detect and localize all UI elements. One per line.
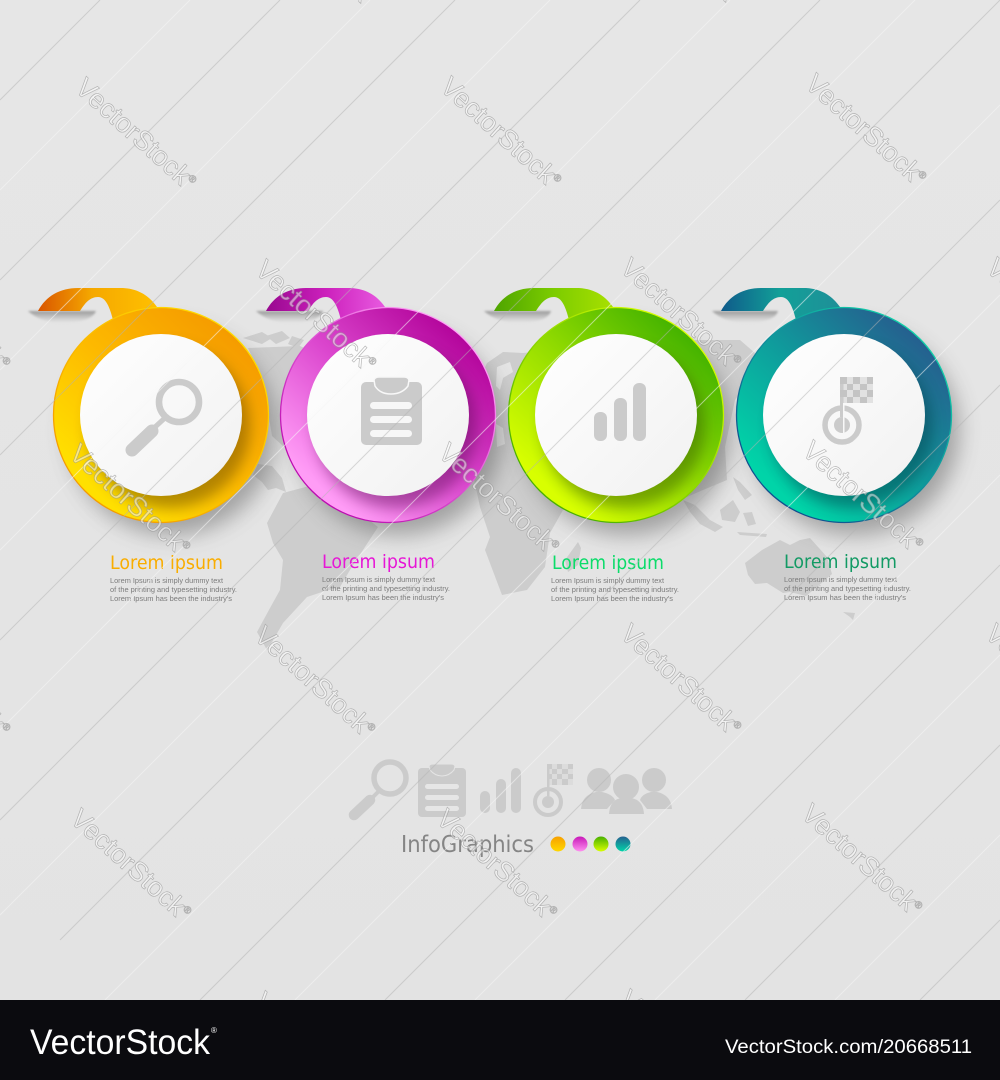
- icon: clipboard: [361, 377, 422, 445]
- watermarks: ®: [548, 538, 562, 552]
- watermarks: ®: [912, 536, 926, 550]
- heading 4: Lorem ipsum: [784, 551, 897, 573]
- watermarks: ®: [364, 721, 378, 735]
- watermarks: ®: [911, 899, 925, 913]
- step 2: clipboard: [256, 288, 503, 602]
- disc 2: [307, 334, 469, 496]
- ribbon tail 4: [712, 288, 840, 323]
- watermarks: VectorStock: [65, 803, 192, 922]
- text 4: Lorem Ipsum has been the industry's: [784, 595, 907, 602]
- text 2: Lorem Ipsum has been the industry's: [322, 595, 445, 602]
- watermarks: ®: [365, 355, 379, 369]
- icon: magnifier: [132, 382, 199, 450]
- text 3: of the printing and typesetting industry.: [551, 587, 679, 594]
- ribbon tail 1: [28, 288, 157, 323]
- text 4: of the printing and typesetting industry.: [784, 586, 911, 593]
- watermarks: ®: [550, 172, 564, 186]
- world map: [243, 331, 855, 650]
- watermarks: ®: [546, 904, 560, 918]
- text 2: Lorem Ipsum is simply dummy text: [322, 577, 435, 584]
- icon: small magnifier: [354, 762, 406, 815]
- watermarks: VectorStock: [250, 254, 377, 373]
- ring 1: [54, 308, 268, 522]
- watermarks: VectorStock: [64, 438, 191, 557]
- watermarks: ®: [185, 173, 199, 187]
- heading 3: Lorem ipsum: [552, 552, 664, 574]
- ring 2: [280, 308, 496, 522]
- heading 1: Lorem ipsum: [110, 552, 223, 574]
- text 4: Lorem Ipsum is simply dummy text: [784, 577, 897, 584]
- watermarks: VectorStock: [431, 803, 558, 922]
- watermarks: VectorStock: [615, 252, 742, 371]
- icon: people: [581, 768, 672, 814]
- ribbon tail 2: [256, 288, 385, 323]
- icon row: [354, 762, 672, 817]
- watermarks: VectorStock: [435, 71, 562, 190]
- watermarks: ®: [180, 904, 194, 918]
- text 1: [110, 578, 237, 603]
- watermarks: VectorStock: [70, 72, 197, 191]
- watermarks: VectorStock: [796, 798, 923, 917]
- step 3: chart: [484, 288, 731, 603]
- colour dots: [550, 836, 630, 852]
- watermarks: VectorStock: [797, 435, 924, 554]
- text 1: of the printing and typesetting industry.: [110, 587, 237, 594]
- icon: small bars: [480, 768, 521, 813]
- registered mark: ®: [211, 1026, 217, 1035]
- text 3: Lorem Ipsum is simply dummy text: [551, 578, 664, 585]
- watermarks: VectorStock: [249, 620, 376, 739]
- watermarks: ®: [915, 169, 929, 183]
- watermarks: VectorStock: [615, 618, 742, 737]
- map inland seas: [496, 362, 513, 447]
- disc 1: [80, 334, 242, 496]
- text 1: Lorem Ipsum is simply dummy text: [110, 578, 223, 585]
- text 2: of the printing and typesetting industry.: [322, 586, 450, 593]
- heading 2: Lorem ipsum: [322, 551, 435, 573]
- icon: bar chart: [594, 383, 646, 441]
- disc 3: [535, 334, 697, 496]
- text 2: [322, 577, 450, 602]
- watermarks: ®: [179, 539, 193, 553]
- ring 3: [508, 308, 724, 522]
- disc 4: [763, 334, 925, 496]
- text 3: [551, 578, 679, 603]
- watermarks: VectorStock: [433, 437, 560, 556]
- watermarks: ®: [730, 719, 744, 733]
- text 3: Lorem Ipsum has been the industry's: [551, 596, 674, 603]
- watermarks: VectorStock: [800, 68, 927, 187]
- icon: small flag: [535, 764, 573, 815]
- step 1: search: [28, 288, 276, 603]
- footer logo: VectorStock: [30, 1023, 210, 1062]
- ring 4: [736, 308, 952, 522]
- step 4: target flag: [712, 288, 959, 602]
- watermarks: ®: [730, 353, 744, 367]
- text 1: Lorem Ipsum has been the industry's: [110, 596, 233, 603]
- infographics label: InfoGraphics: [401, 832, 534, 858]
- icon: small clipboard: [418, 764, 466, 817]
- footer url: VectorStock.com/20668511: [725, 1036, 972, 1058]
- icon: target flag: [825, 377, 873, 442]
- text 4: [784, 577, 911, 602]
- footer bar: [0, 1000, 1000, 1080]
- ribbon tail 3: [484, 288, 613, 323]
